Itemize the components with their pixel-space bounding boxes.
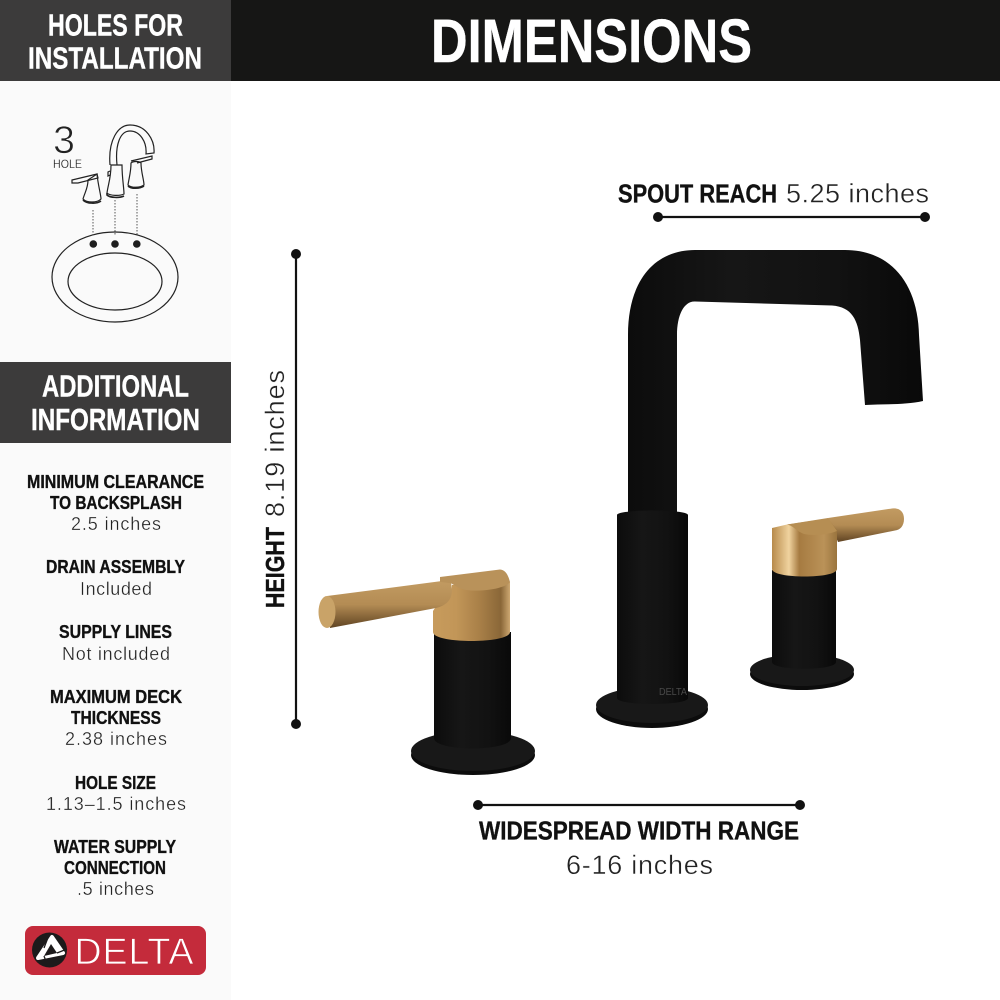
heading: holes for installation: HOLES FOR (48, 8, 183, 42)
spec: hole size (46, 773, 186, 814)
spec: maximum deck thickness: THICKNESS (71, 708, 161, 728)
spec: maximum deck thickness (50, 687, 182, 749)
dimension: spout reach (618, 178, 930, 222)
faucet illustration (318, 250, 923, 775)
logo: delta (25, 926, 206, 975)
faucet: center spout (596, 250, 923, 728)
icon: three hole sink diagram: 3 (53, 119, 75, 162)
spec: supply lines (59, 622, 172, 664)
spec: hole size: HOLE SIZE (75, 773, 156, 793)
logo: delta: DELTA (74, 930, 194, 972)
spec: maximum deck thickness: MAXIMUM DECK (50, 687, 182, 707)
icon: three hole sink diagram (52, 119, 178, 322)
heading: holes for installation: INSTALLATION (28, 40, 202, 76)
spec: drain assembly: Included (80, 579, 152, 599)
spec: water supply connection: CONNECTION (64, 858, 166, 878)
faucet: right handle (750, 508, 904, 690)
dimension: height (260, 249, 301, 729)
dimension: widespread width range: WIDESPREAD WIDTH RANGE (479, 816, 799, 846)
dimension: spout reach: 5.25 inches (786, 178, 929, 208)
dimension: spout reach: SPOUT REACH (618, 178, 777, 208)
spec: water supply connection: WATER SUPPLY (54, 837, 176, 857)
spec: minimum clearance: TO BACKSPLASH (50, 493, 182, 513)
spec: supply lines: SUPPLY LINES (59, 622, 172, 642)
dimension: widespread width range: 6-16 inches (566, 850, 713, 880)
spec: water supply connection (54, 837, 176, 899)
spec: drain assembly (46, 557, 185, 599)
spec: hole size: 1.13–1.5 inches (46, 794, 186, 814)
dimension: height: HEIGHT (260, 527, 290, 608)
spec: minimum clearance: 2.5 inches (71, 514, 161, 534)
spec: minimum clearance: MINIMUM CLEARANCE (27, 472, 204, 492)
dimension: widespread width range (473, 800, 805, 880)
spec: water supply connection: .5 inches (77, 879, 154, 899)
spec: maximum deck thickness: 2.38 inches (65, 729, 167, 749)
header band: dimensions (231, 0, 1000, 81)
heading: additional information: ADDITIONAL (42, 368, 189, 404)
spec: minimum clearance (27, 472, 204, 534)
heading: additional information: INFORMATION (31, 402, 200, 437)
dimension: height: 8.19 inches (260, 370, 290, 517)
faucet: left handle (318, 570, 535, 775)
icon: three hole sink diagram: HOLE (53, 157, 82, 171)
spec: supply lines: Not included (62, 644, 170, 664)
title: DIMENSIONS (431, 7, 752, 75)
engraved logo: DELTA (659, 687, 687, 698)
spec: drain assembly: DRAIN ASSEMBLY (46, 557, 185, 577)
header band: holes for installation (0, 0, 231, 81)
heading: additional information (31, 368, 200, 437)
sidebar background (0, 81, 231, 1000)
heading: holes for installation (28, 8, 202, 76)
header band: additional information (0, 362, 231, 443)
